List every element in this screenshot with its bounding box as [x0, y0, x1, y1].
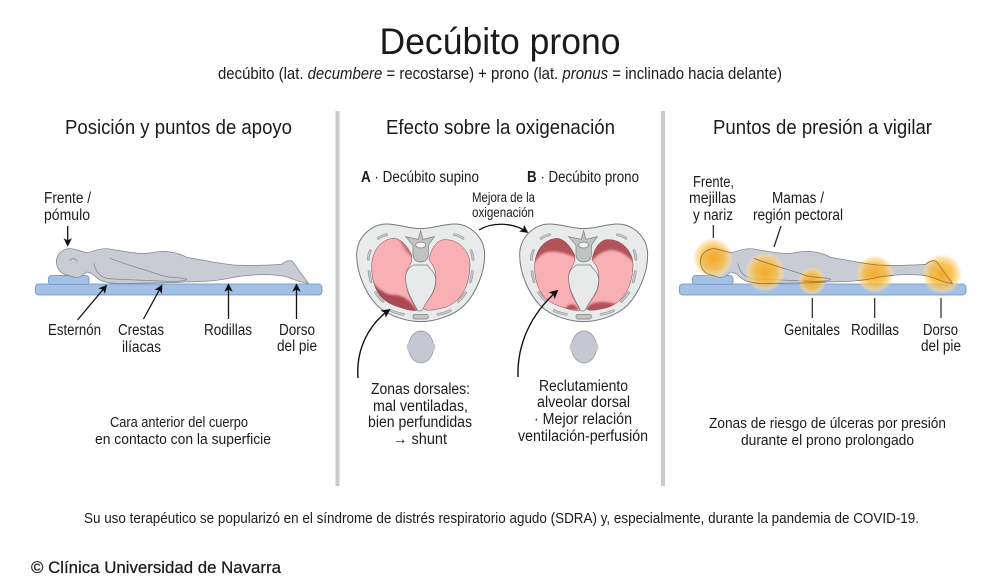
pillow	[692, 276, 733, 284]
label: frente, mejillas y nariz	[689, 174, 736, 238]
caption: zonas de riesgo	[709, 415, 946, 449]
label: rodillas: Rodillas	[204, 322, 252, 339]
icon: head A	[407, 331, 435, 363]
mattress	[35, 284, 322, 295]
label: frente, mejillas y nariz: Frente,	[693, 174, 734, 191]
label: mejora de la oxigenación	[472, 190, 535, 220]
text: zonas dorsales: bien perfundidas	[368, 414, 472, 431]
footer note: Su uso terapéutico se popularizó en el síndrome de distrés respiratorio agudo (SDRA) y, especialmente, durante la pandemia de COVID-19.	[84, 510, 919, 527]
text: reclutamiento: · Mejor relación	[534, 411, 632, 428]
label: genitales	[784, 298, 840, 339]
label: dorso del pie	[921, 298, 961, 355]
label: mamas / región pectoral	[753, 190, 843, 247]
body outline over glows	[700, 249, 952, 284]
label: A decúbito supino: A · Decúbito supino	[361, 169, 479, 186]
pressure glows	[693, 238, 962, 295]
body figure	[56, 249, 308, 284]
label: crestas ilíacas	[118, 286, 164, 356]
label: rodillas	[851, 298, 899, 339]
text: reclutamiento: alveolar dorsal	[537, 394, 630, 411]
text: zonas dorsales	[368, 381, 472, 448]
arrow: mejora	[479, 224, 527, 232]
heading: posición: Posición y puntos de apoyo	[65, 116, 292, 139]
caption: cara anterior	[95, 414, 271, 448]
arrow: zonas dorsales	[358, 310, 389, 378]
text: zonas dorsales: Zonas dorsales:	[371, 381, 470, 398]
panel: posición y puntos de apoyo	[35, 116, 322, 448]
panel: puntos de presión	[679, 116, 966, 449]
label: dorso del pie: del pie	[277, 338, 317, 355]
body figure	[700, 249, 952, 284]
label: esternón	[48, 286, 106, 339]
thorax A: supino	[357, 224, 485, 322]
label: frente / pómulo: Frente /	[44, 190, 92, 207]
caption: zonas de riesgo: Zonas de riesgo de úlceras por presión	[709, 415, 946, 432]
label: esternón: Esternón	[48, 322, 101, 339]
label: mamas / región pectoral: región pectoral	[753, 207, 843, 224]
label: frente / pómulo: pómulo	[44, 207, 90, 224]
panel: efecto sobre la oxigenación	[357, 116, 648, 448]
title: Decúbito prono	[380, 21, 620, 62]
label: mejora de la oxigenación: oxigenación	[472, 205, 534, 220]
copyright: © Clínica Universidad de Navarra	[31, 558, 282, 577]
heading: efecto: Efecto sobre la oxigenación	[386, 116, 615, 139]
text: zonas dorsales: → shunt	[393, 431, 448, 448]
label: B decúbito prono: B · Decúbito prono	[527, 169, 639, 186]
subtitle: decúbito (lat. decumbere = recostarse) + prono (lat. pronus = inclinado hacia delante)	[218, 65, 782, 83]
thorax B: prono	[520, 224, 648, 322]
heading: puntos de presión: Puntos de presión a vigilar	[713, 116, 932, 139]
label: frente / pómulo	[44, 190, 92, 245]
label: mamas / región pectoral: Mamas /	[772, 190, 825, 207]
label: genitales: Genitales	[784, 322, 840, 339]
caption: cara anterior: Cara anterior del cuerpo	[110, 414, 248, 431]
arrow: reclutamiento	[518, 291, 557, 377]
label: dorso del pie	[277, 285, 317, 355]
text: reclutamiento: Reclutamiento	[539, 378, 628, 395]
pillow	[48, 276, 89, 284]
label: frente, mejillas y nariz: mejillas	[689, 190, 736, 207]
text: reclutamiento	[518, 378, 648, 445]
text: reclutamiento: ventilación-perfusión	[518, 428, 648, 445]
label: mejora de la oxigenación: Mejora de la	[472, 190, 535, 205]
caption: zonas de riesgo: durante el prono prolongado	[741, 432, 914, 449]
label: crestas ilíacas: ilíacas	[122, 339, 161, 356]
label: frente, mejillas y nariz: y nariz	[693, 207, 733, 224]
caption: cara anterior: en contacto con la superficie	[95, 431, 271, 448]
label: dorso del pie: Dorso	[923, 322, 958, 339]
label: rodillas	[204, 285, 252, 339]
icon: head B	[570, 331, 598, 363]
label: dorso del pie: del pie	[921, 338, 961, 355]
label: crestas ilíacas: Crestas	[118, 322, 164, 339]
text: zonas dorsales: mal ventiladas,	[373, 398, 468, 415]
mattress	[679, 284, 966, 295]
label: rodillas: Rodillas	[851, 322, 899, 339]
label: dorso del pie: Dorso	[279, 322, 315, 339]
